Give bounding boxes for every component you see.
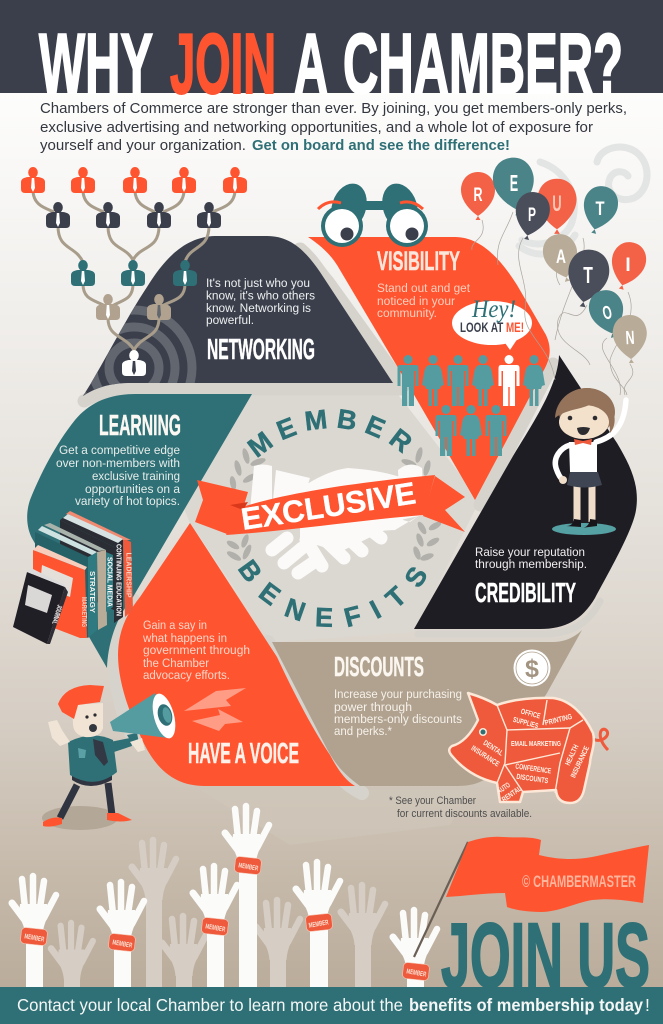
icon: lightning bolts	[184, 688, 246, 731]
discounts body text: power through	[334, 700, 412, 714]
hand 6 with flag	[393, 910, 437, 987]
balloon T2: T	[583, 262, 593, 288]
hand 2: MEMBER	[112, 939, 133, 950]
soft shadow below discounts	[200, 790, 470, 845]
panel: discounts	[272, 630, 582, 786]
balloon O: O	[600, 302, 614, 325]
panel: learning	[27, 394, 252, 668]
intro paragraph: Get on board and see the difference!	[252, 138, 510, 154]
character: man with megaphone	[42, 685, 180, 830]
pig labels: AUTO	[495, 780, 512, 796]
book spine labels: LEADERSHIP	[124, 552, 132, 598]
balloon N: N	[625, 328, 635, 349]
title: A	[294, 17, 328, 112]
pig labels: RENTAL	[500, 784, 523, 804]
speech bubble	[452, 296, 532, 350]
pig labels: DENTAL	[482, 738, 505, 758]
networking body text: know. Networking is	[206, 301, 311, 315]
hand 3: MEMBER	[205, 923, 226, 934]
footer text: !	[645, 995, 650, 1015]
intro paragraph: Chambers of Commerce are stronger than ever. By joining, you get members-only perks,	[40, 101, 627, 117]
laurels	[225, 446, 443, 563]
visibility body text: community.	[377, 306, 437, 320]
pig cut lines	[497, 700, 583, 793]
tan people	[96, 294, 171, 320]
pig eye	[479, 728, 487, 736]
icon: dollar coin	[514, 650, 550, 686]
intro paragraph: yourself and your organization.	[40, 138, 246, 154]
raised hands: gray	[51, 840, 385, 987]
credibility body text: Raise your reputation	[475, 545, 585, 559]
footnote: for current discounts available.	[397, 808, 532, 820]
icon: handshake	[250, 464, 424, 573]
pig labels	[469, 707, 591, 804]
learning body text: variety of hot topics.	[75, 494, 180, 508]
balloon P: P	[528, 205, 536, 226]
learning body text	[56, 443, 180, 508]
arc text: benefits: BENEFITS	[238, 558, 426, 628]
balloon T	[577, 183, 622, 237]
balloon E	[490, 155, 539, 218]
balloon I: I	[625, 255, 631, 276]
balloon A: A	[556, 247, 566, 268]
dark people	[46, 202, 221, 228]
footer text: Contact your local Chamber to learn more about the	[17, 995, 403, 1015]
panel: networking	[83, 236, 393, 396]
hand 4	[225, 806, 269, 987]
hand 5	[296, 862, 340, 987]
pig labels: DISCOUNTS	[516, 772, 549, 785]
voice body text: the Chamber	[143, 656, 209, 670]
balloon N	[612, 314, 648, 364]
panel: have a voice	[118, 523, 355, 786]
pig labels: INSURANCE	[469, 743, 501, 768]
hand 5: MEMBER	[308, 919, 329, 930]
visibility body text: Stand out and get	[377, 281, 471, 295]
book spine labels: SOCIAL MEDIA	[106, 557, 112, 607]
pig diagram	[449, 693, 608, 804]
girl with balloons	[552, 388, 626, 535]
orange back book	[123, 538, 133, 617]
networking body text: It's not just who you	[206, 276, 310, 290]
hand a	[51, 923, 93, 987]
pig labels: OFFICE	[520, 707, 541, 721]
orange people	[21, 167, 247, 193]
learning body text: opportunities on a	[85, 482, 180, 496]
hand 4: MEMBER	[238, 862, 259, 873]
panel: visibility	[308, 237, 550, 500]
voice body text: what happens in	[142, 631, 227, 645]
black small book	[13, 572, 65, 644]
swirl behind balloons	[519, 147, 647, 254]
ribbon	[195, 475, 465, 537]
networking body text	[206, 276, 315, 327]
book spine labels: CONTINUING EDUCATION	[114, 544, 122, 616]
heading: learning: LEARNING	[99, 410, 181, 442]
book spine labels: STRATEGY	[88, 571, 95, 613]
hand 6 with flag: MEMBER	[406, 968, 427, 979]
hand 3	[193, 866, 237, 987]
title	[39, 17, 623, 112]
discounts body text: and perks.*	[334, 724, 392, 738]
hand 1: MEMBER	[24, 933, 45, 944]
learning body text: exclusive training	[92, 469, 180, 483]
discounts body text	[334, 687, 462, 738]
tan spine	[97, 550, 107, 630]
heading: credibility: CREDIBILITY	[475, 577, 576, 608]
balloon strings	[472, 212, 633, 395]
panel: credibility	[414, 355, 637, 629]
book spine labels: MARKETING	[80, 597, 87, 627]
balloons: REPUTATION	[461, 155, 650, 364]
footer band	[0, 987, 663, 1024]
balloon O	[585, 287, 630, 341]
crowd pictogram	[398, 355, 545, 456]
intro paragraph: exclusive advertising and networking opportunities, and a whole lot of exposure for	[40, 120, 593, 136]
title: JOIN	[170, 17, 276, 112]
header band	[0, 0, 663, 93]
voice body text	[142, 618, 250, 682]
signal rings	[83, 306, 196, 396]
balloon T: T	[596, 199, 605, 220]
white person	[122, 350, 146, 376]
arc text: member: MEMBER	[246, 408, 412, 458]
teal book	[35, 532, 88, 638]
speech bubble: LOOK AT ME!	[460, 319, 524, 335]
hand 2	[100, 882, 144, 987]
balloon U	[537, 179, 577, 234]
emblem: member exclusive benefits	[195, 408, 465, 628]
footnote: * See your Chamber	[389, 795, 476, 807]
credibility body text	[475, 545, 587, 571]
network tree	[21, 167, 247, 376]
pig labels: INSURANCE	[568, 745, 591, 779]
balloon R	[461, 172, 495, 220]
hand c	[162, 916, 206, 987]
orange front book	[33, 550, 87, 638]
visibility body text	[377, 281, 471, 320]
pig labels: SUPPLIES	[512, 715, 539, 730]
book spine labels: JOURNAL	[50, 604, 63, 625]
icon: dollar coin: $	[525, 655, 539, 683]
pig labels: EMAIL MARKETING	[511, 739, 561, 748]
footer text: benefits of membership today	[409, 995, 643, 1015]
flag	[414, 837, 649, 957]
speech bubble: Hey!	[471, 296, 516, 323]
pig labels: HEALTH	[563, 743, 580, 767]
pig labels: CONFERENCE	[515, 762, 552, 775]
heading: networking: NETWORKING	[207, 334, 315, 366]
footnote	[389, 795, 532, 820]
hand b	[132, 840, 176, 987]
discounts body text: Increase your purchasing	[334, 687, 462, 701]
balloon R: R	[474, 185, 483, 206]
balloon T2	[562, 246, 613, 310]
footer text	[17, 995, 650, 1015]
raised hands: white with member bands	[12, 806, 437, 987]
voice body text: advocacy efforts.	[143, 668, 230, 682]
ribbon label: EXCLUSIVE	[239, 475, 418, 537]
heading: discounts: DISCOUNTS	[334, 651, 424, 682]
book spine labels	[50, 544, 132, 627]
learning body text: over non-members with	[56, 456, 180, 470]
balloon I	[605, 238, 650, 294]
icon: books	[13, 511, 133, 644]
learning body text: Get a competitive edge	[59, 443, 180, 457]
teal spine	[106, 552, 113, 612]
intro paragraph	[40, 101, 627, 154]
icon: megaphone	[110, 691, 180, 741]
heading: have a voice: HAVE A VOICE	[188, 738, 299, 770]
pig labels: PRINTING	[544, 712, 573, 727]
light bands between panels	[84, 250, 600, 793]
voice body text: government through	[143, 643, 250, 657]
hand d	[256, 900, 300, 987]
hand 1	[12, 876, 56, 987]
icon: binoculars	[318, 179, 428, 247]
hand e	[341, 885, 385, 987]
balloon A	[539, 231, 584, 285]
visibility body text: noticed in your	[377, 294, 455, 308]
balloon P	[510, 189, 553, 243]
heading: visibility: VISIBILITY	[377, 246, 460, 276]
voice body text: Gain a say in	[143, 618, 207, 632]
balloon E: E	[510, 170, 518, 196]
discounts body text: members-only discounts	[334, 712, 462, 726]
title: WHY	[39, 17, 153, 112]
credibility body text: through membership.	[475, 557, 587, 571]
teal people	[71, 260, 197, 286]
center hub	[133, 388, 480, 642]
networking body text: know, it's who others	[206, 288, 315, 302]
balloon U: U	[552, 191, 562, 216]
networking body text: powerful.	[206, 313, 254, 327]
dark book	[60, 514, 123, 623]
pig tail	[592, 729, 608, 750]
